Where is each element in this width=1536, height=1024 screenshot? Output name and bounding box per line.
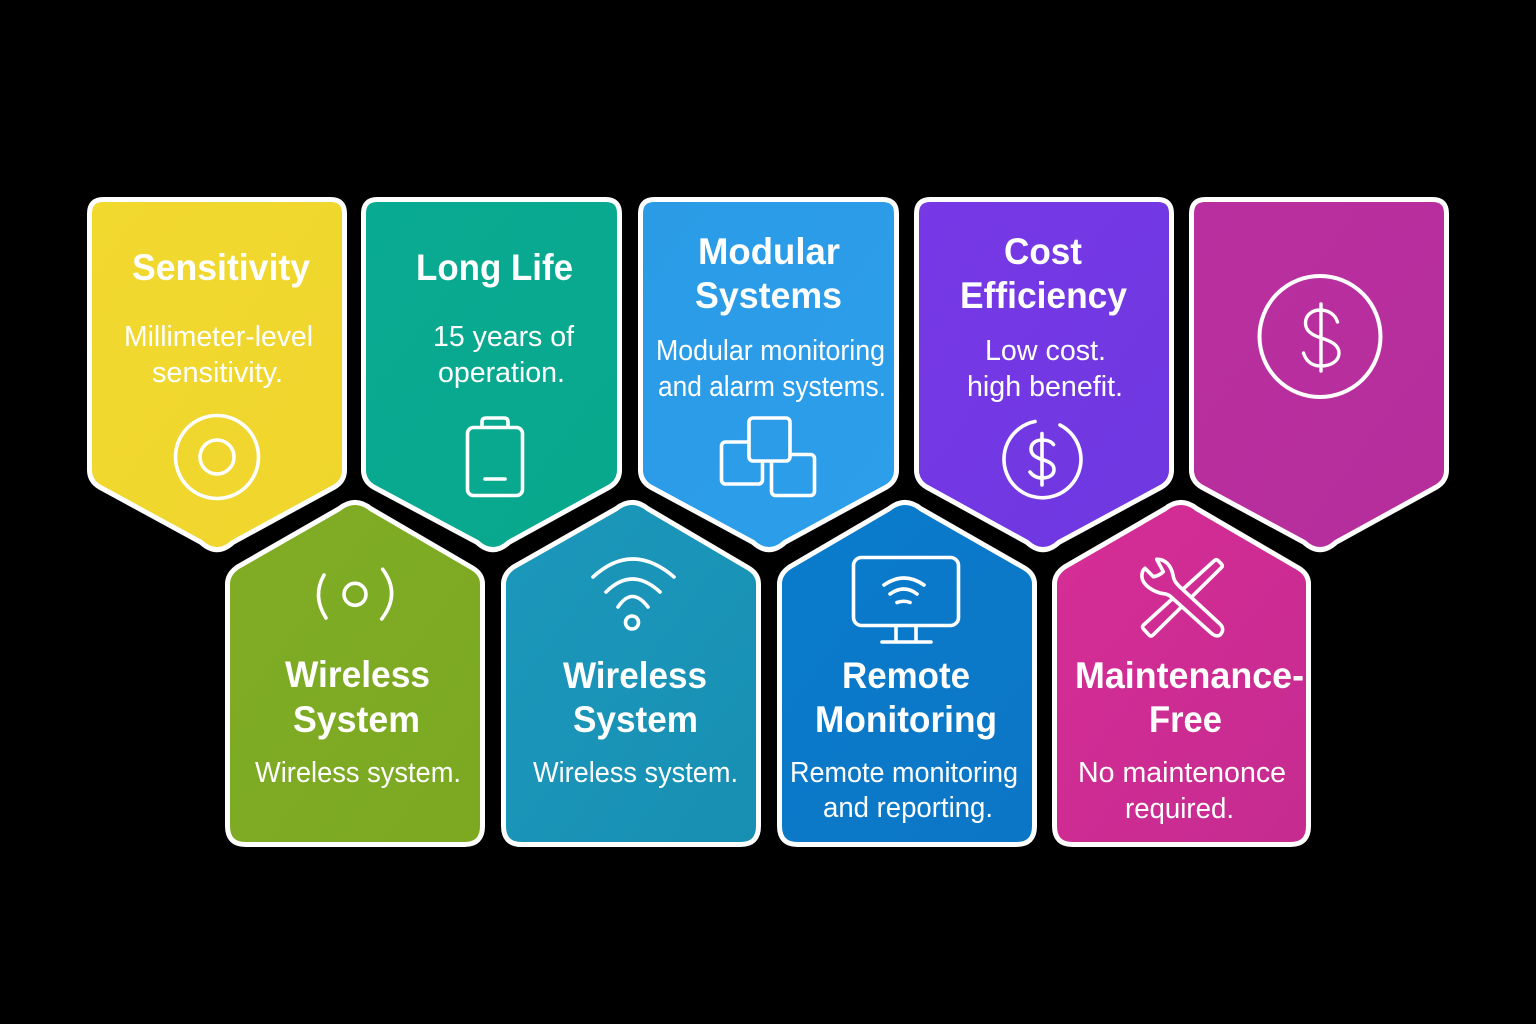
icon: concentric circles	[176, 416, 258, 498]
card shape: yellow	[90, 200, 344, 550]
text: 15 years of operation	[433, 321, 575, 389]
card shape: teal blue	[504, 502, 758, 844]
text: 15 years of operation: 15 years of	[433, 321, 575, 353]
heading: Maintenance-Free	[1075, 655, 1304, 740]
text: Low cost, high benefit	[967, 335, 1123, 403]
heading: Cost Efficiency	[960, 231, 1127, 316]
panel: Wireless System (teal blue)	[504, 502, 758, 844]
text: Millimeter-level sensitivity: sensitivity.	[152, 357, 283, 389]
heading: Remote Monitoring	[815, 655, 997, 740]
icon: monitor with wifi	[854, 558, 958, 642]
heading: Cost Efficiency: Efficiency	[960, 275, 1127, 316]
heading: Modular Systems	[695, 231, 842, 316]
panel: Sensitivity	[90, 200, 344, 550]
text: 15 years of operation: operation.	[438, 357, 565, 389]
panel: Modular Systems	[640, 200, 896, 550]
icon: dollar in open circle	[1004, 422, 1081, 498]
panel: Long Life	[364, 200, 620, 550]
card shape: purple	[916, 200, 1172, 550]
heading: Modular Systems: Systems	[695, 275, 842, 316]
heading: Cost Efficiency: Cost	[1004, 231, 1082, 272]
panel: dollar tile	[1192, 200, 1446, 550]
heading: Wireless System: System	[293, 699, 420, 740]
heading: Modular Systems: Modular	[698, 231, 840, 272]
card shape: teal	[364, 200, 620, 550]
icon: signal	[318, 569, 392, 619]
heading: Maintenance-Free: Free	[1149, 699, 1222, 740]
card shape: pink	[1054, 502, 1308, 844]
heading: Sensitivity: Sensitivity	[132, 247, 310, 288]
card shape: blue	[640, 200, 896, 550]
panel: Wireless System (green)	[228, 502, 482, 844]
heading: Remote Monitoring: Monitoring	[815, 699, 997, 740]
icon: wifi	[593, 559, 674, 629]
text: Millimeter-level sensitivity	[124, 321, 313, 389]
text: Low cost, high benefit: high benefit.	[967, 371, 1123, 403]
icon: battery	[468, 418, 522, 496]
text: Wireless system: Wireless system.	[255, 757, 461, 789]
heading: Wireless System: System	[573, 699, 698, 740]
panel: Maintenance-Free	[1054, 502, 1308, 844]
heading: Wireless System: Wireless	[285, 654, 430, 695]
text: Remote monitoring and reporting	[790, 757, 1018, 824]
text: No maintenonce required: required.	[1125, 793, 1234, 825]
icon: stacked modules	[722, 418, 814, 496]
text: Low cost, high benefit: Low cost.	[985, 335, 1106, 367]
text: Modular monitoring and alarm systems: Modular monitoring	[656, 335, 885, 367]
text: Millimeter-level sensitivity: Millimeter-level	[124, 321, 313, 353]
card shape: deep blue	[780, 502, 1034, 844]
text: Modular monitoring and alarm systems: and alarm systems.	[658, 371, 886, 403]
card shape: magenta	[1192, 200, 1446, 550]
heading: Wireless System: Wireless	[563, 655, 707, 696]
panel: Remote Monitoring	[780, 502, 1034, 844]
text: No maintenonce required	[1078, 757, 1286, 825]
card shape: green	[228, 502, 482, 844]
text: Remote monitoring and reporting: and reporting.	[823, 792, 993, 824]
heading: Remote Monitoring: Remote	[842, 655, 970, 696]
heading: Long Life: Long Life	[416, 247, 573, 288]
heading: Maintenance-Free: Maintenance-	[1075, 655, 1304, 696]
text: Modular monitoring and alarm systems	[656, 335, 886, 403]
text: Wireless system: Wireless system.	[533, 757, 738, 789]
text: Remote monitoring and reporting: Remote monitoring	[790, 757, 1018, 789]
heading: Wireless System	[563, 655, 707, 740]
text: No maintenonce required: No maintenonce	[1078, 757, 1286, 789]
icon: wrench and screwdriver	[1142, 559, 1223, 636]
heading: Wireless System	[285, 654, 430, 740]
icon: dollar in circle	[1260, 276, 1380, 397]
panel: Cost Efficiency	[916, 200, 1172, 550]
